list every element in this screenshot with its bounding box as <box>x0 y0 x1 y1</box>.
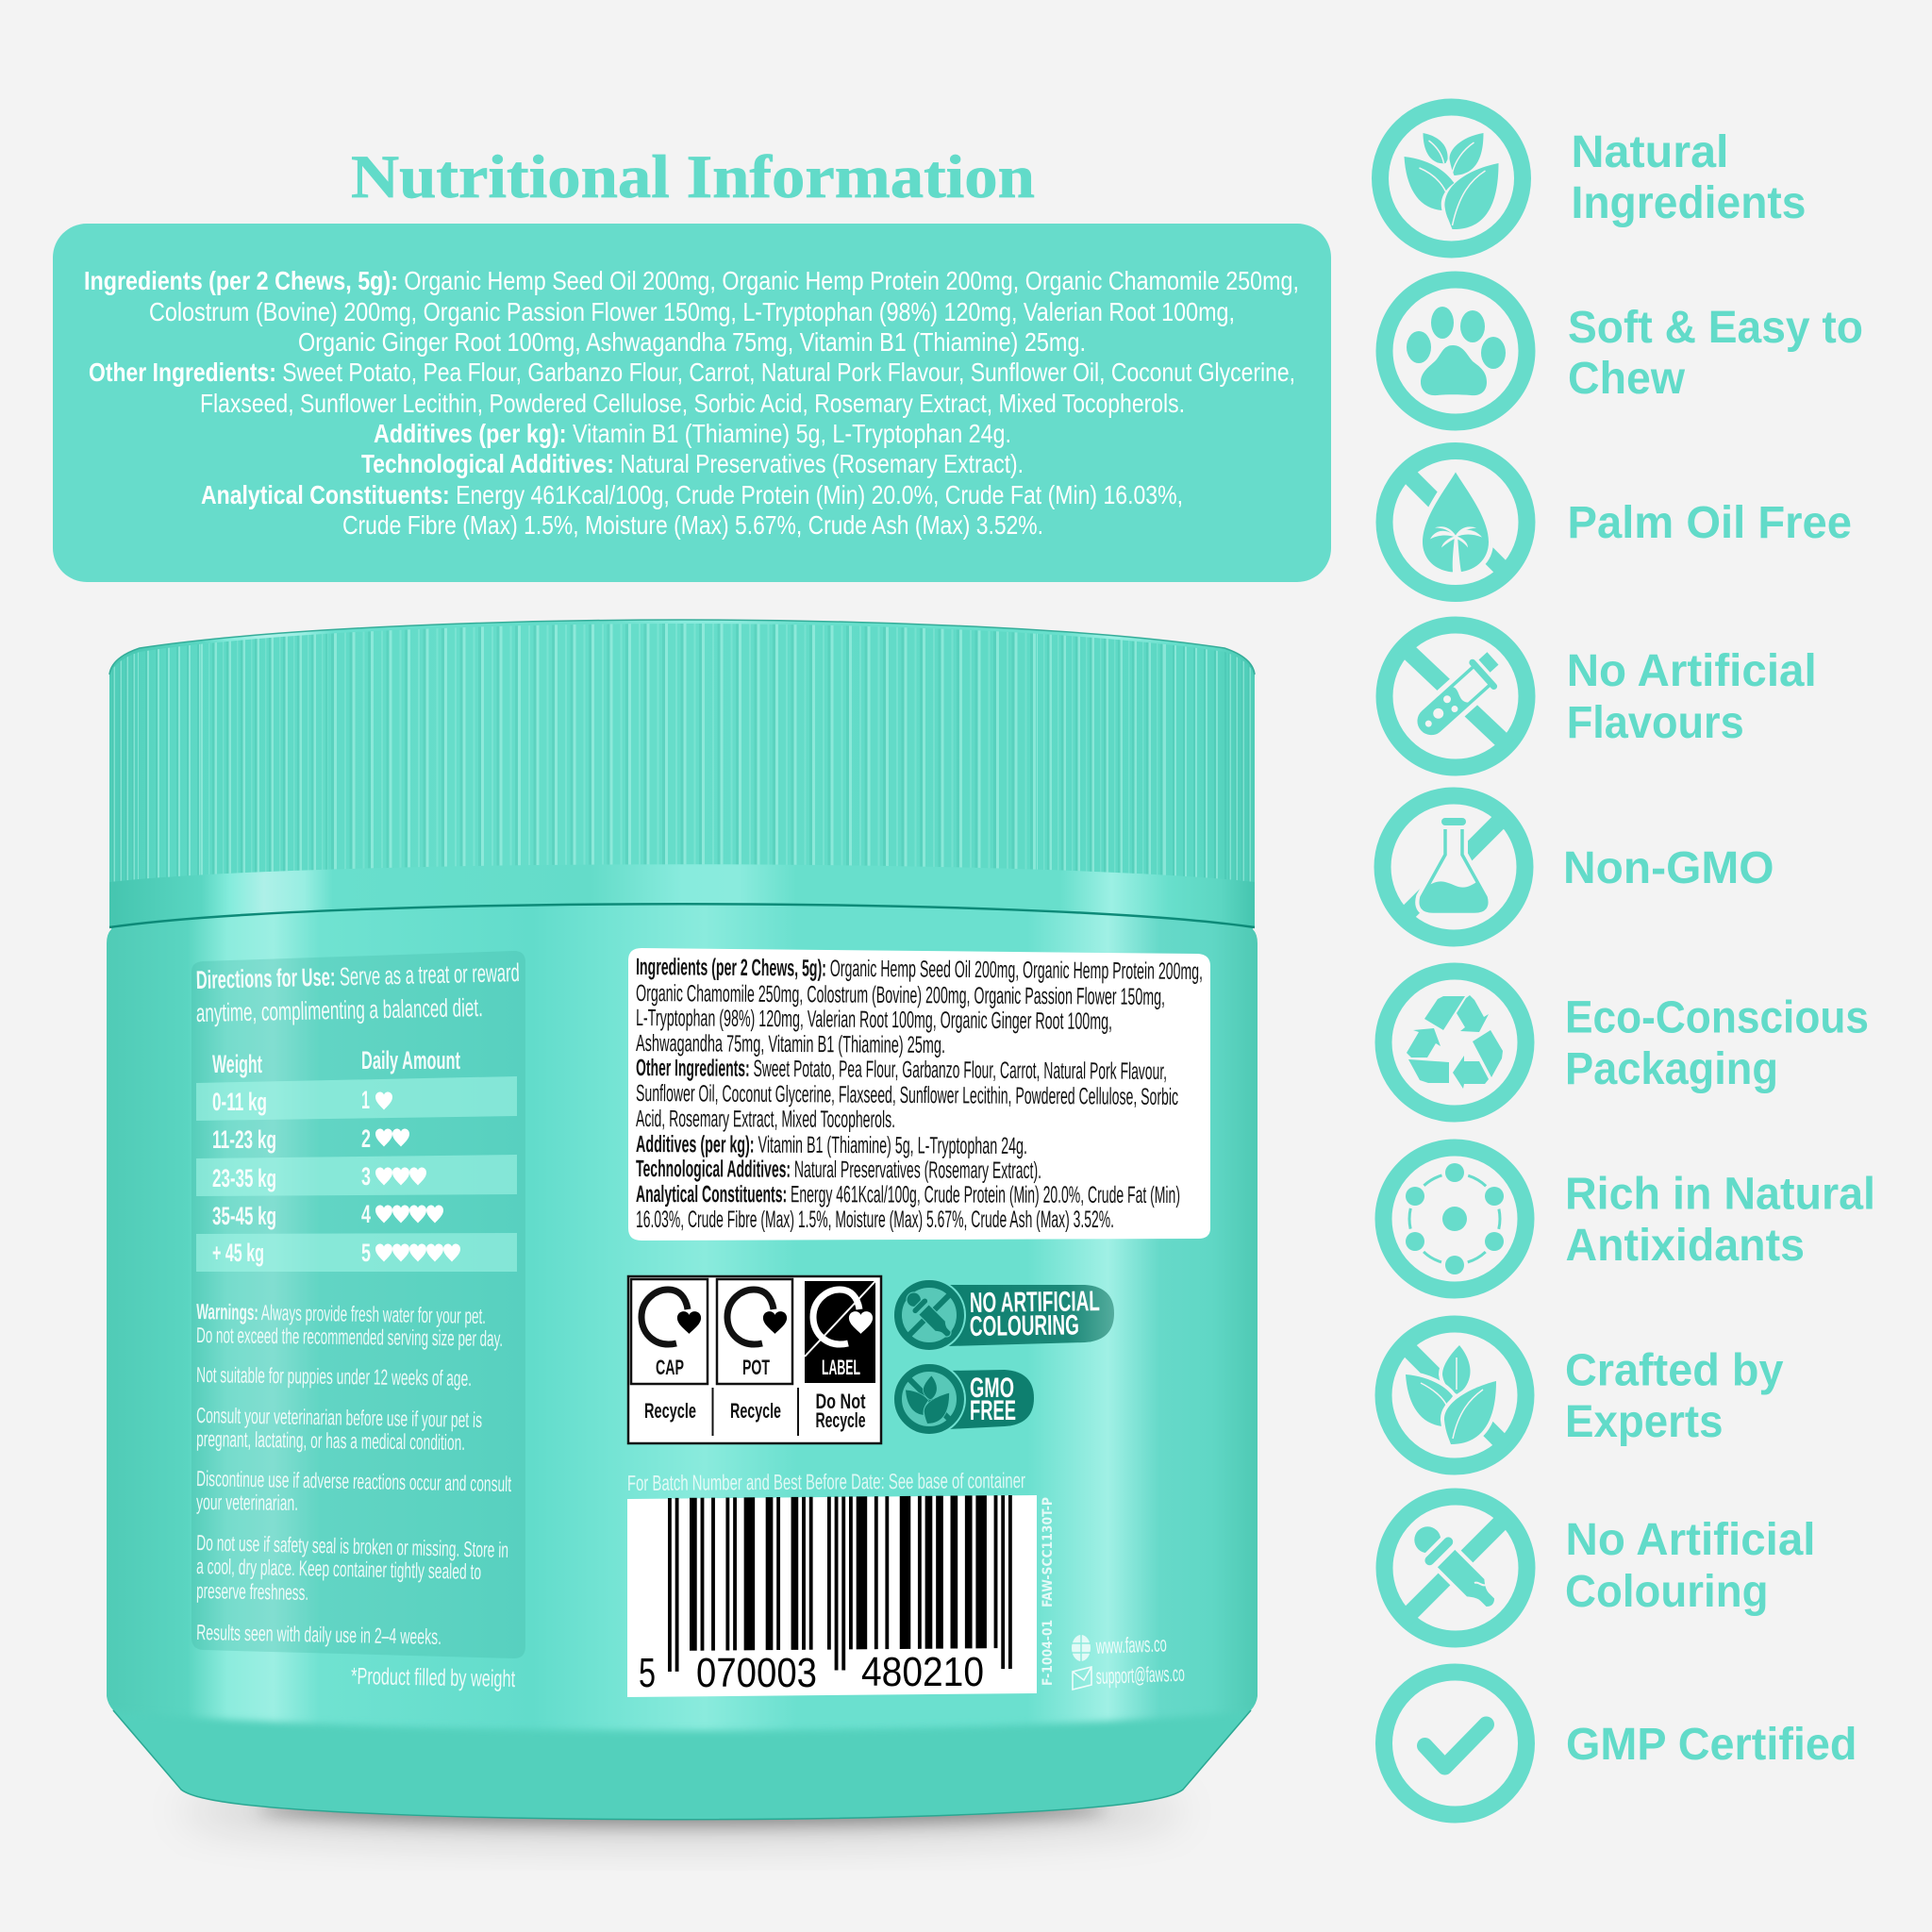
dosage table: 3 <box>361 1162 371 1191</box>
badge: gmo free: FREE <box>970 1395 1016 1426</box>
warnings: Consult your veterinarian before use if your pet is <box>196 1403 482 1432</box>
label: crafted by experts <box>1565 1346 1784 1447</box>
warnings: Not suitable for puppies under 12 weeks of age. <box>196 1362 472 1391</box>
vertical product code: F-1004-01 FAW-SCC1130T-P <box>1041 1497 1056 1686</box>
badge: gmo free: GMO <box>970 1373 1014 1404</box>
contact details <box>1072 1631 1185 1690</box>
icon: globe <box>1072 1635 1091 1661</box>
icon: pot recycle: POT <box>742 1356 770 1379</box>
icon: label do not recycle: LABEL <box>822 1356 860 1379</box>
icon: recycling <box>1383 972 1526 1113</box>
warnings: Do not use if safety seal is broken or missing. Store in <box>196 1530 508 1562</box>
batch note: For Batch Number and Best Before Date: See base of container <box>627 1468 1025 1495</box>
recycling table <box>628 1276 881 1443</box>
jar body <box>94 887 1270 1840</box>
panel: nutritional information: Organic Ginger Root 100mg, Ashwagandha 75mg, Vitamin B1 (Thiamine) 25mg. <box>298 327 1086 357</box>
dosage table: 0-11 kg <box>212 1088 267 1116</box>
icon: envelope <box>1073 1667 1091 1690</box>
label: rich in natural antioxidants: Antixidants <box>1566 1221 1805 1271</box>
icon: cap recycle <box>641 1290 701 1423</box>
badge: no artificial colouring <box>892 1278 1114 1352</box>
panel: nutritional information: Additives (per kg): Vitamin B1 (Thiamine) 5g, L-Tryptophan 24g. <box>374 419 1011 448</box>
icon: label do not recycle <box>805 1281 875 1432</box>
icon: non-gmo flask <box>1383 796 1524 938</box>
contact details: www.faws.co <box>1095 1631 1167 1658</box>
dosage table: 5 <box>361 1239 371 1267</box>
dosage table: 23-35 kg <box>212 1164 276 1192</box>
panel: nutritional information: Analytical Constituents: Energy 461Kcal/100g, Crude Protein (Min) 20.0%, Crude Fat (Min) 16.03%, <box>201 480 1183 509</box>
white ingredients label: L-Tryptophan (98%) 120mg, Valerian Root 100mg, Organic Ginger Root 100mg, <box>636 1005 1112 1035</box>
warnings: Warnings: Always provide fresh water for your pet. <box>196 1299 486 1328</box>
label: rich in natural antioxidants <box>1565 1169 1875 1271</box>
panel: nutritional information <box>53 224 1331 582</box>
label: eco-conscious packaging: Eco-Conscious <box>1565 992 1869 1043</box>
icon: crafted by experts leaves <box>1383 1324 1526 1466</box>
label: soft and easy to chew: Chew <box>1568 354 1686 404</box>
white ingredients label: Technological Additives: Natural Preservatives (Rosemary Extract). <box>636 1156 1041 1184</box>
barcode: 480210 <box>861 1649 984 1695</box>
label: crafted by experts: Crafted by <box>1565 1346 1784 1396</box>
dosage table: 1 <box>361 1086 370 1114</box>
white ingredients label: 16.03%, Crude Fibre (Max) 1.5%, Moisture (Max) 5.67%, Crude Ash (Max) 3.52%. <box>636 1207 1114 1233</box>
warnings: a cool, dry place. Keep container tightly sealed to <box>196 1554 481 1584</box>
dosage table: Daily Amount <box>361 1046 460 1074</box>
badge: gmo free <box>892 1362 1034 1436</box>
label: no artificial flavours <box>1567 646 1817 748</box>
barcode <box>627 1495 1037 1697</box>
label: palm oil free: Palm Oil Free <box>1568 498 1852 548</box>
warnings: pregnant, lactating, or has a medical condition. <box>196 1426 465 1455</box>
directions for use <box>195 958 520 1027</box>
panel: nutritional information: Technological Additives: Natural Preservatives (Rosemary Extract). <box>361 449 1024 478</box>
label: crafted by experts: Experts <box>1565 1397 1723 1447</box>
panel text: ingredients: Ingredients (per 2 Chews, 5g): Organic Hemp Seed Oil 200mg, Organic Hemp Protein 200mg, Organic Chamomile 250mg, <box>84 266 1299 295</box>
icon: gmp certified check <box>1384 1672 1526 1815</box>
warnings: preserve freshness. <box>196 1578 308 1605</box>
dosage table: 4 <box>361 1200 371 1228</box>
jar shadow <box>182 1783 1182 1840</box>
white ingredients label: Other Ingredients: Sweet Potato, Pea Flour, Garbanzo Flour, Carrot, Natural Pork Flavour, <box>636 1055 1167 1085</box>
directions for use: Directions for Use: Serve as a treat or reward <box>195 958 520 994</box>
dosage table: Weight <box>212 1050 262 1078</box>
icon: no artificial flavours <box>1385 625 1526 768</box>
label: no artificial flavours: No Artificial <box>1567 646 1817 696</box>
directions for use: anytime, complimenting a balanced diet. <box>196 993 483 1027</box>
dosage table: 2 <box>361 1124 371 1153</box>
white ingredients label: Sunflower Oil, Coconut Glycerine, Flaxseed, Sunflower Lecithin, Powdered Cellulose, Sorbic <box>636 1080 1178 1110</box>
panel: nutritional information: Other Ingredients: Sweet Potato, Pea Flour, Garbanzo Flour, Carrot, Natural Pork Flavour, Sunflower Oil, Coconut Glycerine, <box>89 358 1295 387</box>
white ingredients label: Ashwagandha 75mg, Vitamin B1 (Thiamine) 25mg. <box>636 1030 945 1058</box>
fill note: *Product filled by weight <box>351 1663 515 1692</box>
dosage table: + 45 kg <box>212 1239 264 1267</box>
label: no artificial colouring: No Artificial <box>1566 1515 1815 1565</box>
barcode: 070003 <box>696 1650 817 1696</box>
label: no artificial colouring <box>1565 1515 1815 1617</box>
label: no artificial colouring: Colouring <box>1565 1567 1768 1617</box>
dosage table: 35-45 kg <box>212 1202 276 1230</box>
icon: cap recycle: Recycle <box>644 1399 696 1423</box>
label: natural ingredients: Ingredients <box>1572 178 1806 228</box>
white ingredients label: Organic Chamomile 250mg, Colostrum (Bovine) 200mg, Organic Passion Flower 150mg, <box>636 980 1165 1010</box>
white ingredients label: Additives (per kg): Vitamin B1 (Thiamine) 5g, L-Tryptophan 24g. <box>636 1131 1027 1159</box>
warnings: your veterinarian. <box>196 1490 298 1515</box>
icon: palm oil free <box>1385 451 1526 593</box>
jar <box>94 613 1270 1840</box>
white ingredients label: Analytical Constituents: Energy 461Kcal/100g, Crude Protein (Min) 20.0%, Crude Fat (Min) <box>636 1181 1180 1208</box>
label: natural ingredients <box>1572 127 1806 228</box>
label: eco-conscious packaging <box>1565 992 1869 1094</box>
title: Nutritional Information <box>351 143 1035 211</box>
panel: nutritional information: Colostrum (Bovine) 200mg, Organic Passion Flower 150mg, L-Tryptophan (98%) 120mg, Valerian Root 100mg, <box>149 297 1235 326</box>
icon: label do not recycle: Do Not <box>815 1390 866 1413</box>
icon: antioxidant molecule <box>1383 1147 1526 1291</box>
white ingredients label <box>628 948 1210 1241</box>
barcode: 5 <box>639 1650 656 1696</box>
badge: no artificial colouring: NO ARTIFICIAL <box>970 1286 1100 1319</box>
icon: no artificial colouring pipette <box>1385 1496 1526 1640</box>
icon: pot recycle <box>727 1290 787 1423</box>
warnings: Results seen with daily use in 2–4 weeks. <box>196 1620 441 1649</box>
icon: label do not recycle: Recycle <box>815 1408 866 1432</box>
label: non-gmo: Non-GMO <box>1563 843 1774 893</box>
label: no artificial flavours: Flavours <box>1567 698 1744 748</box>
panel: nutritional information: Crude Fibre (Max) 1.5%, Moisture (Max) 5.67%, Crude Ash (Max) 3.52%. <box>342 510 1043 540</box>
label: eco-conscious packaging: Packaging <box>1565 1044 1778 1094</box>
contact details: support@faws.co <box>1095 1661 1185 1689</box>
label: gmp certified: GMP Certified <box>1566 1720 1857 1770</box>
label: soft and easy to chew: Soft & Easy to <box>1568 303 1863 353</box>
badge: no artificial colouring: COLOURING <box>970 1309 1079 1342</box>
warnings: Discontinue use if adverse reactions occur and consult <box>196 1466 512 1496</box>
icon: paw <box>1385 279 1526 423</box>
label: soft and easy to chew <box>1568 303 1863 404</box>
dosage table: 11-23 kg <box>212 1125 276 1154</box>
dosage table <box>196 1046 517 1272</box>
white ingredients label: Acid, Rosemary Extract, Mixed Tocopherols. <box>636 1106 895 1133</box>
label: rich in natural antioxidants: Rich in Natural <box>1565 1169 1875 1219</box>
warnings <box>196 1299 512 1649</box>
directions panel <box>192 951 525 1658</box>
warnings: Do not exceed the recommended serving size per day. <box>196 1323 503 1351</box>
icon: pot recycle: Recycle <box>730 1399 781 1423</box>
panel: nutritional information: Flaxseed, Sunflower Lecithin, Powdered Cellulose, Sorbic Acid, Rosemary Extract, Mixed Tocopherols. <box>200 389 1185 418</box>
jar lid <box>109 613 1255 927</box>
icon: cap recycle: CAP <box>656 1356 684 1379</box>
label: natural ingredients: Natural <box>1572 127 1728 177</box>
white ingredients label: Ingredients (per 2 Chews, 5g): Organic Hemp Seed Oil 200mg, Organic Hemp Protein 200mg, <box>636 954 1203 985</box>
icon: natural ingredients <box>1380 108 1523 249</box>
